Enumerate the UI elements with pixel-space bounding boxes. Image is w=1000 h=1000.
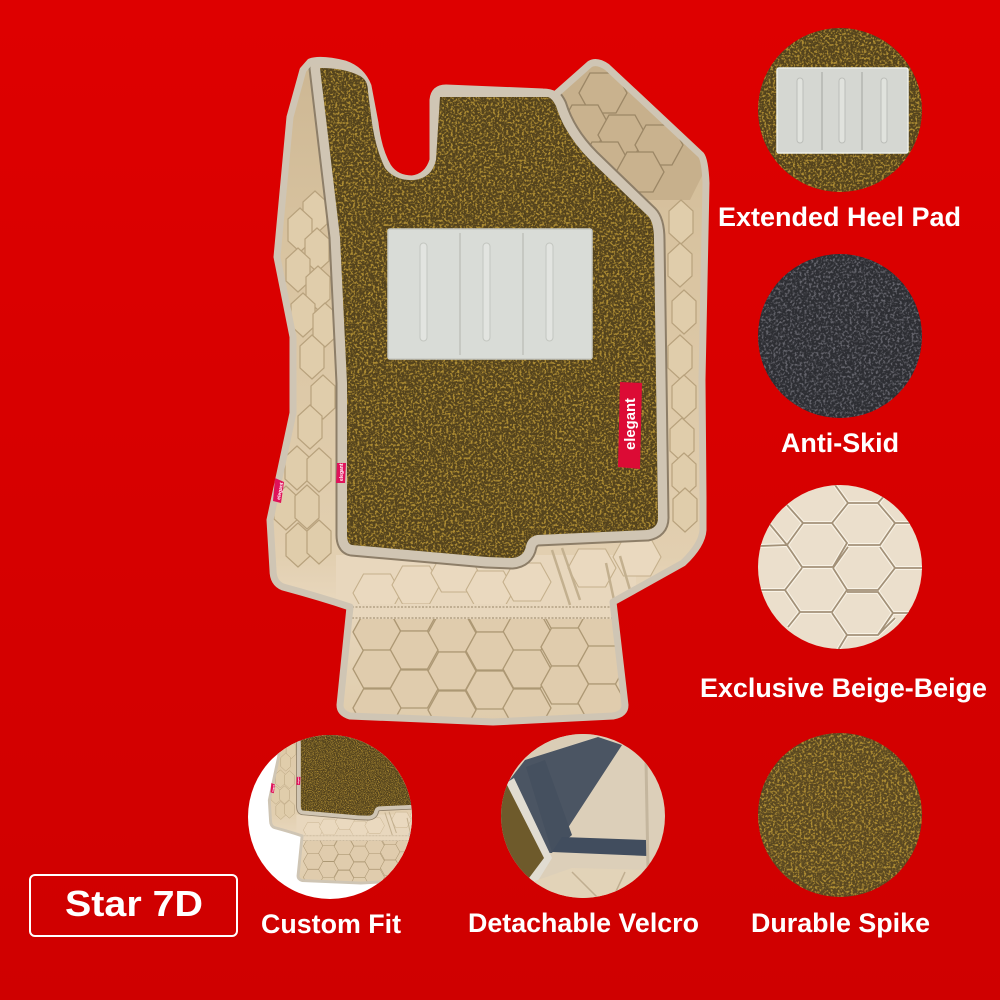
label: custom fit: Custom Fit	[261, 909, 401, 939]
small tag: outer	[273, 478, 285, 503]
circle: spike carpet	[755, 730, 925, 900]
circle: mat corner on white	[248, 735, 412, 899]
circle: anti-skid backing	[755, 250, 925, 420]
quilted hexagon leather	[274, 60, 710, 729]
mat leather body	[270, 60, 706, 722]
circle: beige hexagon leather	[755, 482, 925, 652]
small tag: outer: elegant	[276, 482, 285, 500]
mat outer binding	[270, 60, 706, 722]
label: exclusive beige-beige: Exclusive Beige-Beige	[700, 673, 987, 703]
small tag: inner	[336, 463, 346, 483]
feature: durable spike	[751, 730, 930, 938]
feature: exclusive beige-beige	[700, 482, 987, 703]
car floor mat	[270, 60, 710, 729]
circle: heel pad close-up	[755, 25, 925, 195]
heel pad	[388, 229, 592, 359]
small tag: inner: elegant	[339, 463, 345, 481]
label: anti-skid: Anti-Skid	[781, 428, 899, 458]
feature: detachable velcro	[468, 730, 699, 938]
label: extended heel pad: Extended Heel Pad	[718, 202, 961, 232]
feature: anti-skid	[755, 250, 925, 458]
circle: velcro close-up	[501, 734, 665, 898]
brand tag: elegant: elegant	[622, 398, 639, 450]
product badge: Star 7D: Star 7D	[65, 883, 203, 924]
carpet border	[320, 68, 658, 558]
label: detachable velcro: Detachable Velcro	[468, 908, 699, 938]
feature: custom fit	[248, 735, 412, 934]
brown spike carpet	[315, 60, 665, 565]
product badge: Star 7D	[30, 875, 237, 936]
feature: extended heel pad	[718, 25, 961, 232]
label: durable spike: Durable Spike	[751, 908, 930, 938]
brand tag: elegant	[618, 382, 642, 469]
